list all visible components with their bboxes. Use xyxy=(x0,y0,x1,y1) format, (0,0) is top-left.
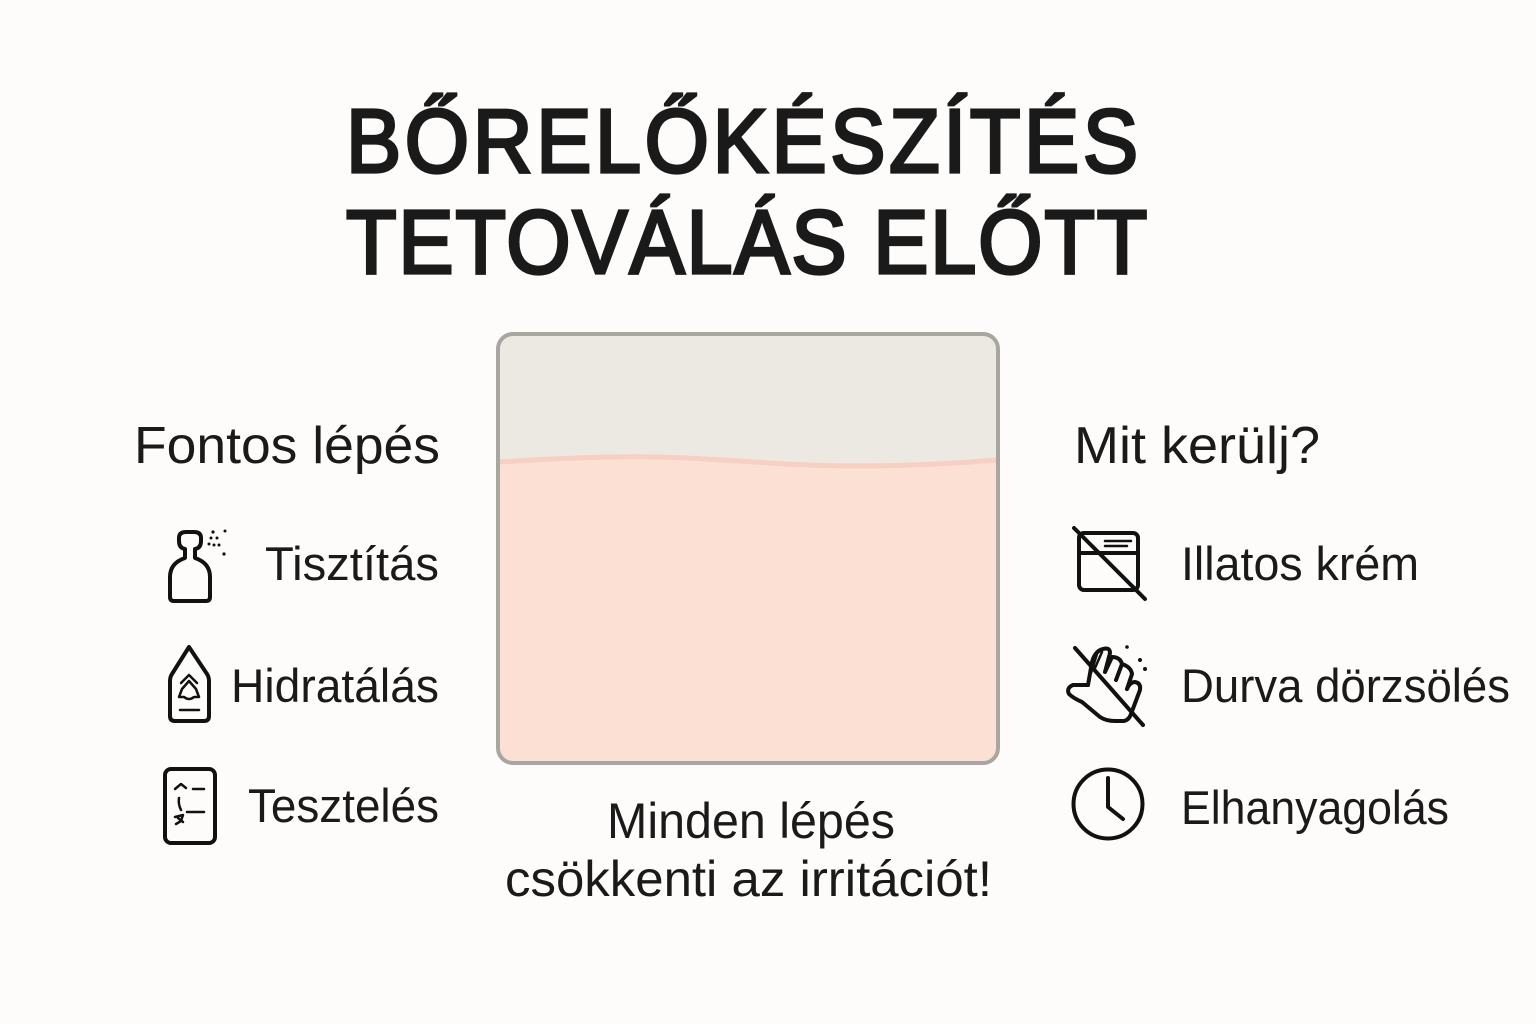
caption xyxy=(505,793,992,907)
right heading: Mit kerülj? xyxy=(1074,417,1320,475)
title xyxy=(346,92,1147,293)
right item: rough rubbing: Durva dörzsölés xyxy=(1181,659,1510,712)
panel: skin cross-section xyxy=(498,334,998,763)
right item: scented cream: Illatos krém xyxy=(1181,537,1419,590)
icon: clock xyxy=(1074,770,1142,838)
right item: neglect xyxy=(1074,770,1449,838)
icon: crossed-out cream xyxy=(1074,528,1145,599)
right item: scented cream xyxy=(1074,528,1419,599)
caption: Minden lépés xyxy=(607,793,895,849)
icon: test card xyxy=(165,769,215,843)
left item: cleansing xyxy=(170,530,439,601)
icon: lotion bottle xyxy=(170,647,209,721)
right item: rough rubbing xyxy=(1068,645,1510,725)
caption: csökkenti az irritációt! xyxy=(505,851,992,907)
right item: neglect: Elhanyagolás xyxy=(1181,781,1449,834)
left item: testing: Tesztelés xyxy=(248,779,439,832)
left heading: Fontos lépés xyxy=(134,417,440,475)
left item: moisturizing xyxy=(170,647,439,721)
left item: cleansing: Tisztítás xyxy=(265,537,439,590)
icon: spray bottle xyxy=(170,530,226,601)
left item: testing xyxy=(165,769,439,843)
title: BŐRELŐKÉSZÍTÉS xyxy=(346,92,1138,192)
title: TETOVÁLÁS ELŐTT xyxy=(346,193,1147,293)
icon: crossed-out hand xyxy=(1068,645,1147,725)
left item: moisturizing: Hidratálás xyxy=(231,659,439,712)
